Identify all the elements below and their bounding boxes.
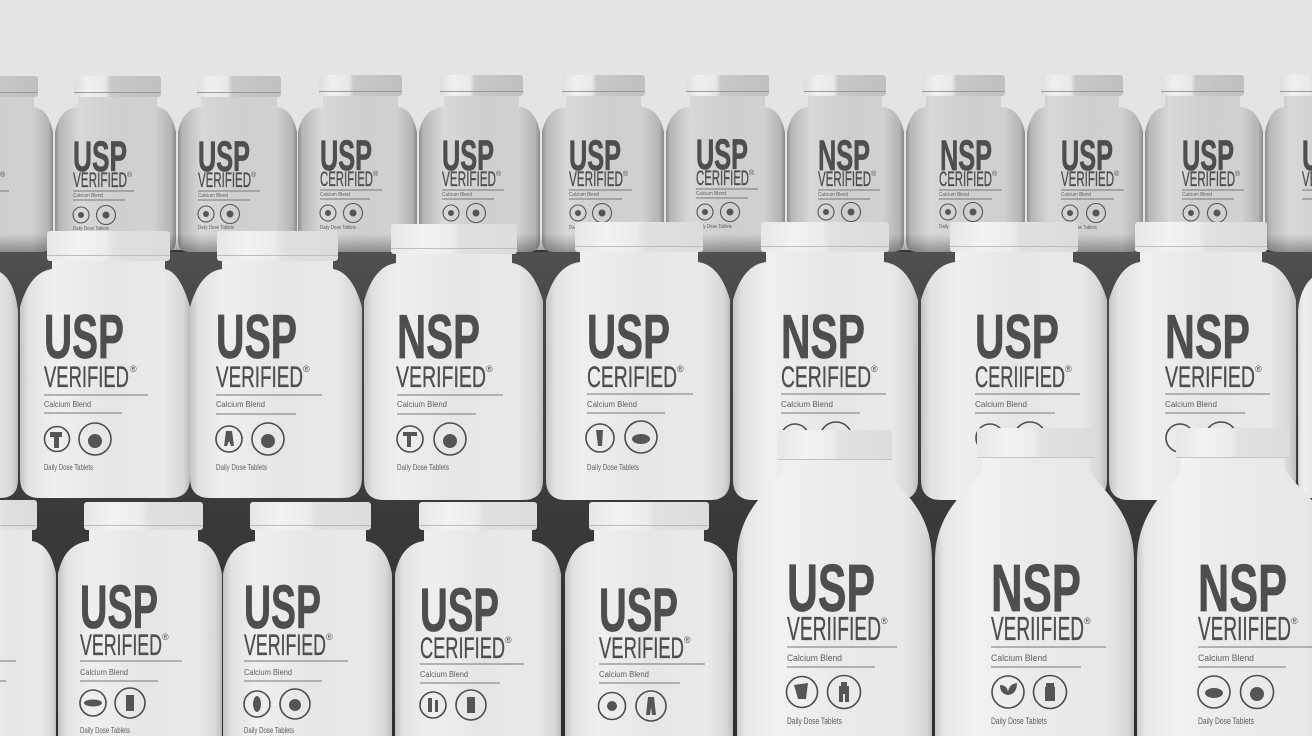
bottle: back row 2: ® (251, 171, 257, 179)
bottle: middle row partial left (0, 272, 18, 498)
bottle: middle row 7: VERIFIED (1165, 361, 1255, 394)
bottle: back row 2: Daily Dose Tablets (198, 225, 234, 231)
bottle: middle row 5 (733, 222, 918, 500)
bottle: back row 4: Calcium Blend (442, 192, 472, 198)
bottle: middle row 2: USP (216, 303, 297, 372)
bottle: front tall 1: VERIIFIED (787, 610, 881, 647)
bottle: lower row 1: Calcium Blend (80, 668, 128, 677)
bottle: middle row 7: ® (1255, 364, 1262, 374)
bottle: front tall 3: Daily Dose Tablets (1198, 716, 1254, 726)
bottle: back row 7: Calcium Blend (818, 192, 848, 198)
bottle: back row 6: Calcium Blend (696, 191, 726, 197)
bottle: middle row 5: CERIFIED (781, 361, 871, 394)
middle row of bottles (0, 222, 1312, 500)
bottle: middle row 6: USP (975, 303, 1059, 372)
bottle: back row 9: USP (1061, 132, 1113, 180)
bottle: front tall 2 (935, 428, 1134, 736)
bottle: back row 7: Daily Dose Tablets (818, 224, 854, 230)
background: dark shelf band (0, 250, 1312, 736)
bottle: back row 10: USP (1182, 132, 1234, 180)
bottle: back row 3: CERIFIED (320, 168, 373, 191)
background: light wall (0, 0, 1312, 254)
bottle: middle row 2: Daily Dose Tablets (216, 463, 267, 472)
bottle: back row partial left: ® (0, 171, 6, 179)
bottle: back row 3 (298, 75, 417, 252)
bottle: lower row 3: CERIFIED (420, 632, 505, 665)
bottle: back row 8 (906, 75, 1025, 252)
bottle: back row 10: Daily Dose Tablets (1182, 225, 1218, 231)
bottle: lower row 3: ® (505, 635, 512, 645)
bottle: middle row 1: Calcium Blend (44, 400, 91, 409)
bottle: middle row 6: CERIIFIED (975, 361, 1065, 394)
bottle: lower row 4: ® (684, 635, 691, 645)
bottle: back row 1: USP (73, 133, 127, 181)
bottle: back row 1: Daily Dose Tablets (73, 226, 109, 232)
bottle: back row 9: ® (1114, 170, 1120, 178)
bottle: front tall 2: ® (1084, 616, 1091, 626)
bottle: lower row 2: VERIFIED (244, 629, 326, 662)
bottle: middle row 4 (546, 222, 730, 500)
bottle: front tall 3: Calcium Blend (1198, 653, 1254, 663)
bottle: back row 10: Calcium Blend (1182, 192, 1212, 198)
bottle: middle row 2: ® (303, 364, 310, 374)
bottle: middle row 3 (364, 224, 543, 500)
bottle: middle row 4: USP (587, 303, 670, 372)
bottle: middle row 6 (921, 222, 1107, 500)
bottle: back row 4: USP (442, 132, 494, 180)
bottle: back row partial left (0, 76, 53, 252)
bottle: back row 1: VERIFIED (73, 169, 127, 192)
bottle: middle row 3: NSP (397, 303, 480, 372)
bottle: back row 5: Daily Dose Tablets (569, 225, 605, 231)
bottle: lower row 2: ® (326, 632, 333, 642)
bottle: back row 7 (787, 75, 904, 252)
bottle: lower row 4 (565, 502, 733, 736)
bottle: lower row 3 (395, 502, 561, 736)
bottle: back row 5 (542, 75, 664, 252)
bottle: back row 1: Calcium Blend (73, 193, 103, 199)
bottle: middle row 3: Calcium Blend (397, 400, 447, 409)
bottle: back row 8: ® (992, 170, 998, 178)
bottle: front tall 3 (1137, 428, 1312, 736)
bottle: lower row 1: VERIFIED (80, 629, 162, 662)
bottle: front tall 3: ® (1291, 616, 1298, 626)
bottle: lower row 4: USP (599, 576, 678, 644)
bottle: back row 6 (666, 75, 785, 252)
front row of tall bottles (737, 428, 1312, 736)
bottle: middle row 3: Daily Dose Tablets (397, 463, 449, 472)
bottle: front tall 1: Calcium Blend (787, 653, 842, 663)
bottle: lower row 2: USP (244, 573, 321, 641)
bottle: lower row 1: ® (162, 632, 169, 642)
bottle: middle row 4: Calcium Blend (587, 400, 637, 409)
bottle: back row 9 (1027, 75, 1143, 252)
bottle: middle row 7: NSP (1165, 303, 1250, 372)
bottle: front tall 2: VERIIFIED (991, 610, 1084, 647)
bottle: lower row 3: USP (420, 576, 499, 644)
bottle: middle row 1 (20, 231, 190, 498)
bottle: back row 4 (419, 75, 540, 252)
bottle: back row 2: Calcium Blend (198, 193, 228, 199)
bottle: front tall 2: NSP (991, 551, 1081, 626)
bottle: lower row 4: Calcium Blend (599, 670, 649, 679)
lower left row of bottles (0, 500, 733, 736)
bottle: back row 8: Calcium Blend (939, 192, 969, 198)
bottle: back row 3: Daily Dose Tablets (320, 225, 356, 231)
bottle: back row 8: NSP (940, 132, 992, 180)
bottle: middle row 7: Calcium Blend (1165, 400, 1217, 409)
bottle: middle row 2: Calcium Blend (216, 400, 265, 409)
bottle: back row 9: VERIFIED (1061, 168, 1114, 191)
bottle: back row 9: Daily Dose Tablets (1061, 225, 1097, 231)
bottle: lower row 3: Calcium Blend (420, 670, 468, 679)
bottle: back row 5: Calcium Blend (569, 192, 599, 198)
bottle: back row 6: CERIFIED (696, 167, 749, 190)
bottle: middle row 1: VERIFIED (44, 361, 129, 394)
bottle: lower row 1: Daily Dose Tablets (80, 726, 130, 735)
bottle: front tall 2: Daily Dose Tablets (991, 716, 1047, 726)
bottle: lower row 2: Calcium Blend (244, 668, 292, 677)
bottle: lower row 1 (58, 502, 222, 736)
bottle: back row 5: ® (623, 170, 629, 178)
bottle: back row 10: ® (1235, 170, 1241, 178)
bottle: back row 4: Daily Dose Tablets (442, 225, 478, 231)
bottle: back row 9: Calcium Blend (1061, 192, 1091, 198)
bottle: middle row 1: ® (130, 364, 137, 374)
bottle: middle row 4: Daily Dose Tablets (587, 463, 639, 472)
bottle: back row 7: VERIFIED (818, 168, 871, 191)
bottle: back row 6: USP (696, 131, 748, 179)
bottle: middle row 4: ® (677, 364, 684, 374)
bottle: middle row 2: VERIFIED (216, 361, 303, 394)
bottle: front tall 1: ® (881, 616, 888, 626)
bottle: middle row 6: Calcium Blend (975, 400, 1027, 409)
bottle: back row 2: USP (198, 133, 250, 181)
bottle: back row 2: VERIFIED (198, 169, 251, 192)
bottle: lower row 4: VERIFIED (599, 632, 684, 665)
bottle: lower row 1: USP (80, 573, 158, 641)
bottle: back row 8: Daily Dose Tablets (939, 224, 975, 230)
bottle: back row 5: VERIFIED (569, 168, 623, 191)
bottle: back row 10 (1145, 75, 1263, 252)
bottle: back row 5: USP (569, 132, 621, 180)
bottle: back row 1: ® (127, 171, 133, 179)
bottle: front tall 1: Daily Dose Tablets (787, 716, 842, 726)
bottle: middle row partial right (1298, 270, 1312, 498)
bottle: back row 2 (178, 76, 297, 252)
bottle: back row 3: USP (320, 132, 372, 180)
bottle: middle row 3: VERIFIED (396, 361, 486, 394)
bottle: back row 6: ® (749, 169, 755, 177)
bottle: lower row partial left (0, 500, 56, 736)
bottle: back row partial right (1265, 75, 1312, 252)
bottle: middle row 5: Calcium Blend (781, 400, 833, 409)
bottle: front tall 1 (737, 430, 932, 736)
bottle: middle row 6: ® (1065, 364, 1072, 374)
bottle: middle row 7 (1109, 222, 1296, 500)
bottle: back row 4: ® (496, 170, 502, 178)
bottle: back row 7: ® (871, 170, 877, 178)
bottle: middle row 1: Daily Dose Tablets (44, 463, 93, 472)
bottle: middle row 2 (190, 231, 362, 498)
bottle: front tall 1: USP (787, 551, 875, 626)
bottle: middle row 1: USP (44, 303, 124, 372)
back row of bottles (0, 75, 1312, 252)
bottle: middle row 4: CERIFIED (587, 361, 677, 394)
bottle: back row 10: VERIFIED (1182, 168, 1235, 191)
bottle: back row 3: ® (373, 170, 379, 178)
bottle: back row 3: Calcium Blend (320, 192, 350, 198)
bottle: back row 1 (55, 76, 176, 252)
bottle: lower row 2 (223, 502, 392, 736)
bottle: lower row 2: Daily Dose Tablets (244, 726, 294, 735)
bottle: front tall 2: Calcium Blend (991, 653, 1047, 663)
bottle: back row 6: Daily Dose Tablets (696, 224, 732, 230)
bottle: middle row 5: ® (871, 364, 878, 374)
bottle: back row 8: CERIFIED (939, 168, 992, 191)
bottle: back row 4: VERIFIED (442, 168, 496, 191)
bottle: back row 7: NSP (818, 132, 870, 180)
bottle: middle row 3: ® (486, 364, 493, 374)
bottle: middle row 5: NSP (781, 303, 865, 372)
